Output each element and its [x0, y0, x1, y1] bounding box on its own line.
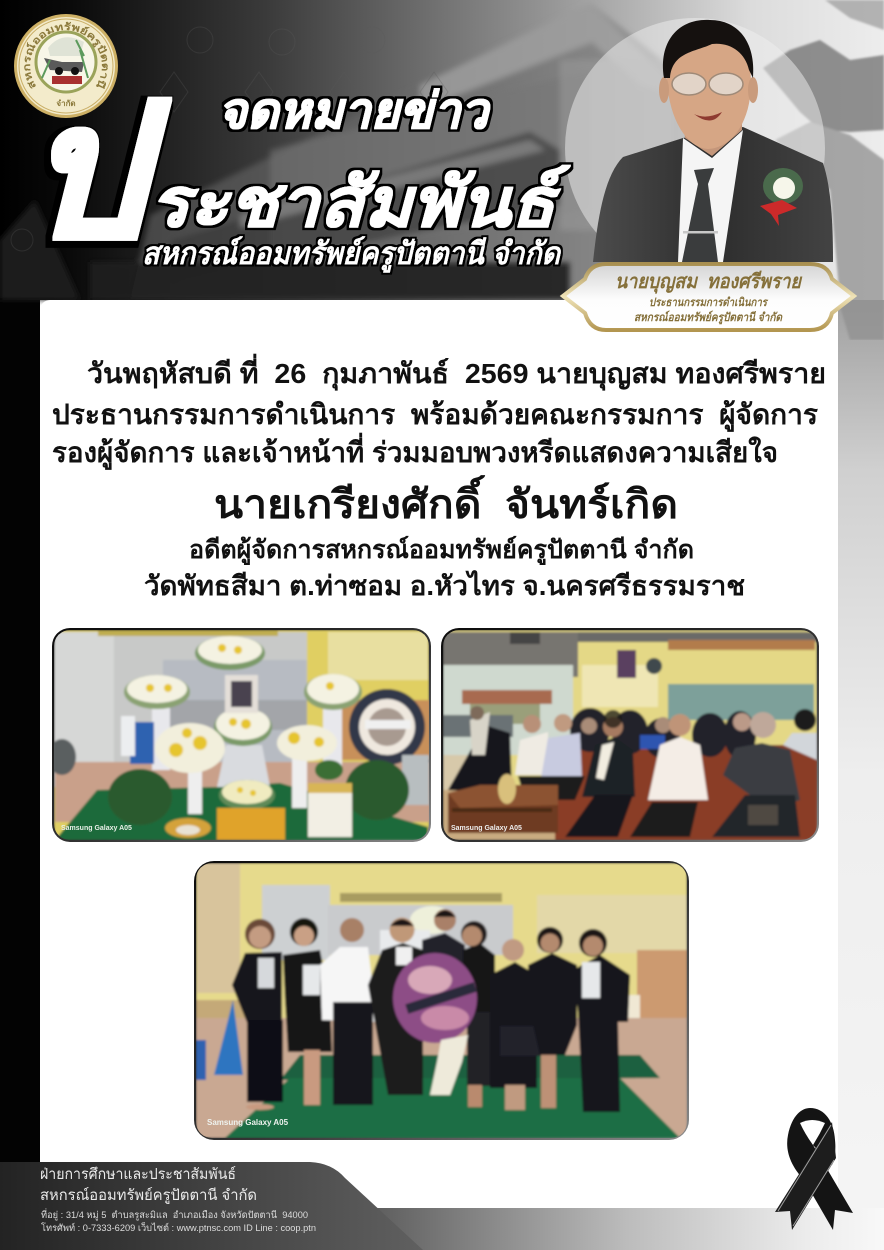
photo watermark: Samsung Galaxy A05 [451, 825, 522, 832]
deceased name: นายเกรียงศักดิ์ จันทร์เกิด [214, 475, 678, 527]
tree silhouette [763, 0, 884, 340]
footer strip [370, 1208, 884, 1250]
wreath right [349, 689, 425, 765]
ferns [108, 769, 172, 825]
man in white [648, 737, 708, 800]
flower arrangements [194, 642, 266, 671]
people [232, 952, 282, 1025]
chairman name: นายบุญสม ทองศรีพราย [615, 270, 803, 294]
shirt [678, 130, 743, 262]
heads [523, 715, 541, 733]
photo 1: funeral flowers [48, 628, 431, 842]
black ribbon [775, 1108, 853, 1230]
footer address: ที่อยู่ : 31/4 หมู่ 5 ตำบลรูสะมิแล อำเภอเมือง จังหวัดปัตตานี 94000 [41, 1208, 308, 1221]
left margin [0, 300, 40, 1170]
logo inner emblem [36, 32, 96, 92]
offerings [308, 785, 352, 837]
photo watermark: Samsung Galaxy A05 [207, 1118, 289, 1127]
logo bottom text: จำกัด [56, 99, 76, 108]
footer heading line 1: ฝ่ายการศึกษาและประชาสัมพันธ์ [40, 1166, 236, 1183]
portrait of chairman [593, 20, 833, 262]
heads [245, 919, 275, 949]
floor [196, 1018, 687, 1138]
chairman role: ประธานกรรมการดำเนินการ [649, 296, 769, 309]
photo 2: seated mourners [441, 628, 819, 842]
venue: วัดพัทธสีมา ต.ท่าซอม อ.หัวไทร จ.นครศรีธรรมราช [144, 570, 745, 601]
logo [14, 14, 118, 118]
background flowers [409, 905, 444, 935]
title: organisation name: สหกรณ์ออมทรัพย์ครูปัตตานี จำกัด [142, 236, 562, 273]
logo ring text: สหกรณ์ออมทรัพย์ครูปัตตานี [24, 22, 108, 89]
portrait on altar [225, 675, 258, 713]
footer panel [0, 1162, 423, 1250]
suit [593, 127, 833, 262]
footer heading line 2: สหกรณ์ออมทรัพย์ครูปัตตานี จำกัด [40, 1187, 257, 1204]
deceased title: อดีตผู้จัดการสหกรณ์ออมทรัพย์ครูปัตตานี จำกัด [189, 535, 694, 566]
glasses [672, 73, 706, 95]
face [667, 32, 751, 149]
title: large letter: ป [26, 69, 171, 276]
tie [682, 168, 718, 262]
white panel [40, 300, 838, 1250]
title: จดหมายข่าว: จดหมายข่าว [218, 83, 491, 139]
hair [663, 20, 753, 78]
building silhouette [0, 3, 700, 300]
body text: รองผู้จัดการ และเจ้าหน้าที่ ร่วมมอบพวงหรีดแสดงความเสียใจ [52, 432, 778, 470]
young man [783, 733, 817, 760]
man in black [582, 737, 635, 797]
left group [448, 725, 512, 793]
pedestals [152, 708, 170, 770]
table [448, 793, 558, 833]
wreath [393, 953, 477, 1043]
boutonniere [763, 168, 803, 204]
footer contact: โทรศัพท์ : 0-7333-6209 เว็บไซต์ : www.ptnsc.com ID Line : coop.ptn [41, 1221, 316, 1234]
photo 3: group with wreath [194, 861, 689, 1140]
back row [570, 708, 756, 759]
neck [683, 112, 742, 156]
smile [694, 112, 722, 121]
name plate [563, 264, 854, 330]
body text [52, 353, 826, 470]
body text: ประธานกรรมการดำเนินการ พร้อมด้วยคณะกรรมการ ผู้จัดการ [52, 399, 818, 432]
title: ประชาสัมพันธ์: ระชาสัมพันธ์ [150, 165, 571, 241]
header background [0, 0, 884, 340]
faint ornament pattern [11, 27, 448, 251]
body text: วันพฤหัสบดี ที่ 26 กุมภาพันธ์ 2569 นายบุญสม ทองศรีพราย [87, 353, 826, 391]
chairman organisation: สหกรณ์ออมทรัพย์ครูปัตตานี จำกัด [634, 310, 783, 325]
photo watermark: Samsung Galaxy A05 [61, 825, 132, 832]
old man [723, 743, 800, 810]
portrait circle [565, 18, 825, 278]
chairs [555, 745, 817, 840]
right margin gradient [838, 300, 884, 1250]
